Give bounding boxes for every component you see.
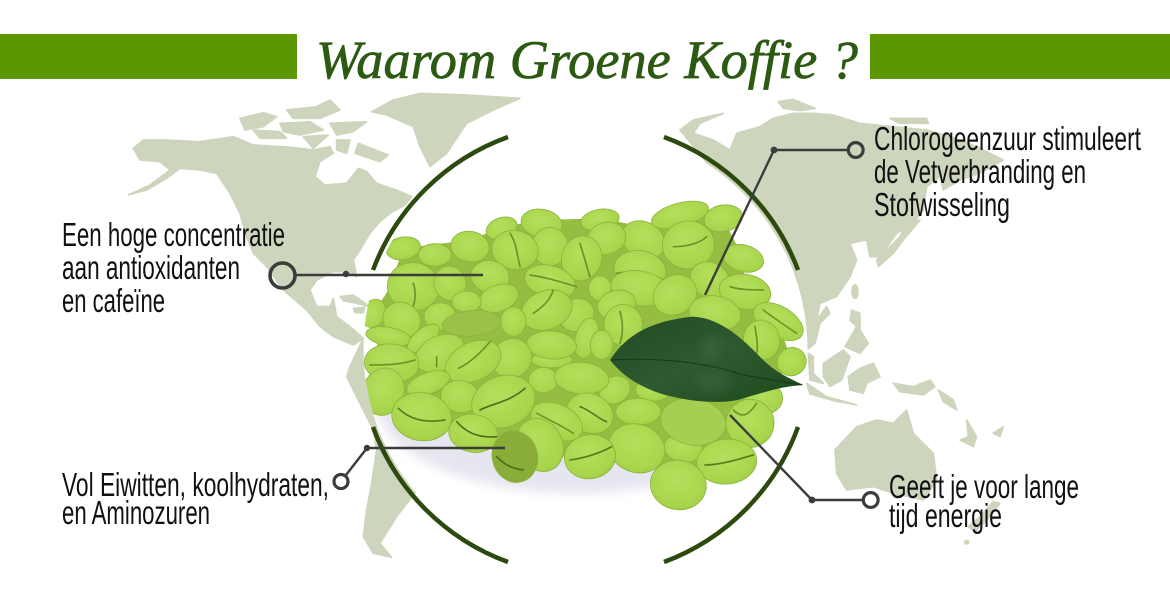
callout: antioxidants: en cafeïne xyxy=(62,282,165,319)
right banner bar xyxy=(870,34,1170,79)
callout: energy xyxy=(730,415,1079,534)
photo: green coffee beans and leaf xyxy=(356,196,811,514)
callout: proteins xyxy=(62,445,505,531)
bean shadow xyxy=(377,410,778,496)
sumatra and java xyxy=(807,383,857,405)
pacific islands xyxy=(938,390,957,410)
taiwan xyxy=(852,285,858,298)
australia xyxy=(835,410,937,500)
caribbean islands xyxy=(340,295,370,307)
title: Waarom Groene Koffie ? xyxy=(316,30,858,90)
world map: americas xyxy=(128,93,520,557)
callout: chlorogenic acid xyxy=(705,120,1141,295)
left banner bar xyxy=(0,34,297,79)
callout: antioxidants: Een hoge concentratie xyxy=(62,216,285,253)
arctic islands xyxy=(240,113,277,130)
new guinea xyxy=(893,380,935,395)
leaf xyxy=(610,317,803,402)
callout: chlorogenic acid: Stofwisseling xyxy=(874,186,1010,223)
callout: proteins: Vol Eiwitten, koolhydraten, xyxy=(62,466,329,503)
callout: energy: Geeft je voor lange xyxy=(889,468,1079,505)
beans xyxy=(356,196,811,514)
greenland xyxy=(372,93,520,167)
circle frame arcs xyxy=(373,137,798,562)
eurasia xyxy=(680,113,1003,350)
callout: antioxidants: aan antioxidanten xyxy=(62,249,240,286)
fiji islands xyxy=(960,420,977,447)
japan xyxy=(877,220,920,267)
tasmania xyxy=(965,541,969,544)
world map: asia and oceania xyxy=(680,99,1003,544)
borneo xyxy=(823,350,850,387)
indonesian islands xyxy=(848,363,880,393)
callout: energy: tijd energie xyxy=(889,497,1002,534)
north america xyxy=(128,137,412,345)
bean gaps xyxy=(373,215,792,485)
north island xyxy=(778,99,815,111)
south america xyxy=(347,338,500,557)
novaya island xyxy=(890,118,928,123)
new zealand xyxy=(968,502,1000,532)
malay peninsula xyxy=(808,353,823,383)
new caledonia xyxy=(993,427,1003,437)
indochina xyxy=(845,310,868,353)
white photo circle xyxy=(364,128,808,572)
callout: antioxidants xyxy=(62,216,483,319)
callout: proteins: en Aminozuren xyxy=(62,494,210,531)
